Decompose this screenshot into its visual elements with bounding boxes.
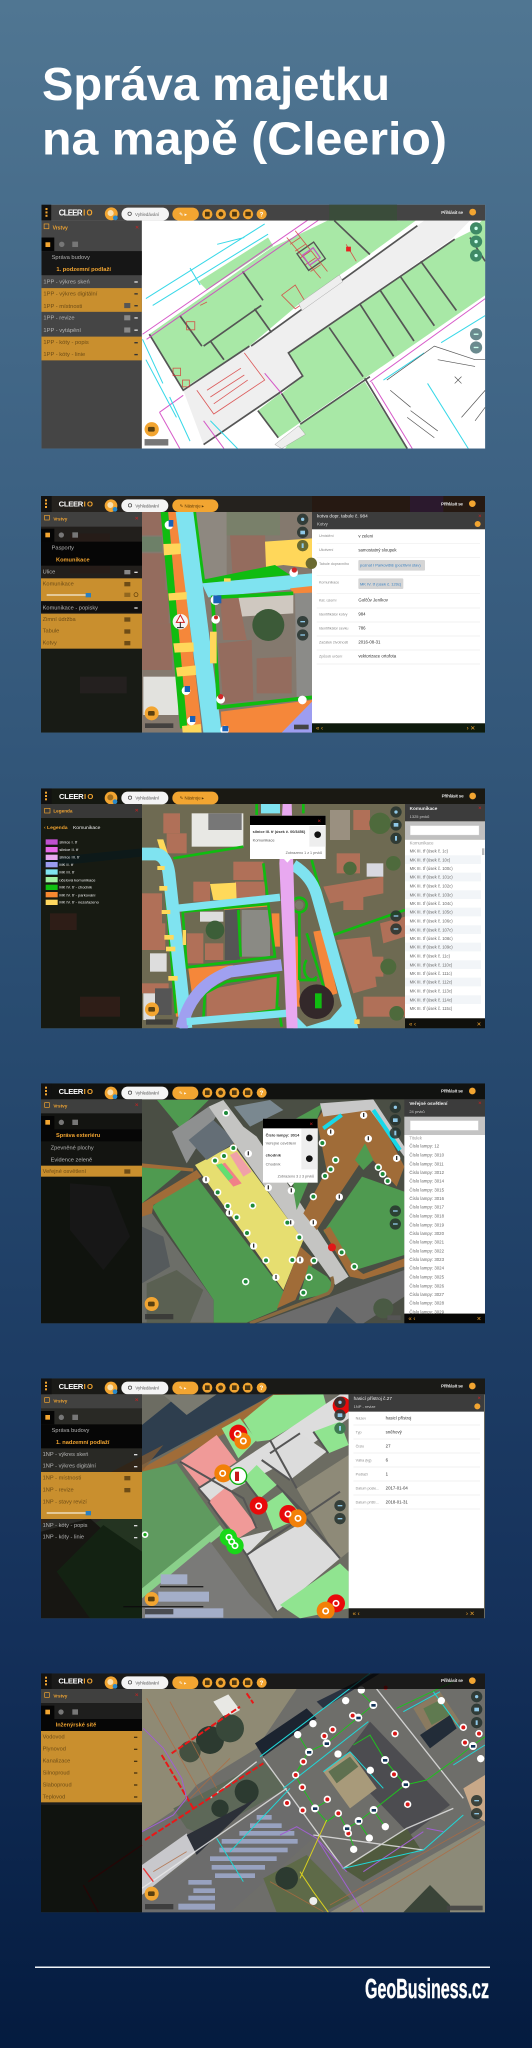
right panel: extinguisher detail: 1 (386, 1472, 389, 1477)
sidebar: layers: 1NP - revize (43, 1488, 74, 1494)
sidebar: layers: Slaboproud (43, 1782, 72, 1788)
sidebar: layers: Tabule (43, 629, 59, 635)
sidebar: layers: 1. nadzemní podlaží (56, 1440, 110, 1446)
right panel: sign anchor detail: Tabule dopravního (319, 562, 349, 566)
sidebar: layers: Silnoproud (43, 1770, 70, 1776)
right panel: lamp list: Číslo lampy: 3022 (409, 1248, 445, 1253)
sidebar: legend: silnice II. tř (59, 847, 79, 852)
right panel: lamp list: ✕ (477, 1317, 481, 1323)
right panel: road list (405, 804, 485, 1028)
right panel: road list: Komunikace (410, 841, 434, 846)
app header bar: IO (84, 792, 93, 801)
sidebar: legend: Legenda (53, 809, 73, 814)
app header bar: Vyhledávání (135, 1680, 160, 1685)
right panel: sign anchor detail: kotva dopr. tabule č. 984 (317, 514, 368, 519)
right panel: extinguisher detail: hasicí přístroj č.27 (354, 1396, 392, 1401)
sidebar: layers: Komunikace (56, 557, 90, 563)
popup: road info (250, 816, 326, 863)
right panel: lamp list: Číslo lampy: 3028 (409, 1301, 445, 1306)
sidebar: layers: Vrstvy (53, 1104, 68, 1109)
right panel: sign anchor detail: v zeleni (358, 533, 373, 538)
app header bar (41, 1673, 485, 1689)
sidebar: legend (41, 804, 142, 1028)
right panel: road list: MK III. tř (úsek č. 110c) (410, 962, 453, 967)
map controls (145, 1102, 401, 1320)
sidebar: layers: Komunikace (43, 582, 74, 588)
sidebar: layers: ✕ (135, 1103, 139, 1109)
right panel: extinguisher detail: 6 (386, 1458, 389, 1463)
app header bar: Vyhledávání (135, 212, 160, 217)
right panel: sign anchor detail: ✕ (478, 513, 482, 518)
right panel: road list: MK III. tř (úsek č. 104c) (410, 901, 453, 906)
right panel: lamp list: Číslo lampy: 3015 (409, 1187, 445, 1192)
right panel: lamp list: Číslo lampy: 3011 (409, 1161, 444, 1166)
app header bar: Vyhledávání (135, 796, 160, 801)
panel: screenshot 6 – engineering networks (41, 1673, 485, 1912)
popup: lamp info: Zobrazeno 3 z 3 prvků (278, 1175, 314, 1179)
right panel: lamp list: Číslo lampy: 3024 (409, 1266, 445, 1271)
popup: lamp info: chodník (266, 1153, 282, 1158)
sidebar: legend: silnice III. tř (59, 855, 80, 860)
app header bar: IO (83, 208, 93, 217)
sidebar: layers: Vodovod (43, 1735, 65, 1741)
right panel: road list: MK III. tř (úsek č. 114c) (410, 997, 453, 1002)
sidebar: layers: ✕ (135, 1693, 139, 1699)
app header bar: CLEER (59, 500, 84, 509)
right panel: lamp list: 24 prvků (409, 1109, 425, 1114)
right panel: lamp list: Číslo lampy: 3027 (409, 1292, 445, 1297)
right panel: extinguisher detail: hasicí přístroj (386, 1416, 411, 1421)
app header bar: CLEER (59, 1087, 84, 1096)
right panel: road list: MK III. tř (úsek č. 102c) (410, 883, 453, 888)
sidebar: layers (41, 221, 142, 449)
app header bar: Přihlásit se (441, 210, 464, 216)
right panel: sign anchor detail: Ukotvení (319, 548, 333, 552)
right panel: extinguisher detail: Váha (kg) (356, 1459, 372, 1463)
sidebar: layers: Správa budovy (52, 1428, 90, 1434)
app header bar (41, 496, 485, 512)
right panel: lamp list: Číslo lampy: 3023 (409, 1257, 445, 1262)
right panel: road list: MK III. tř (úsek č. 106c) (410, 918, 453, 923)
right panel: lamp list: Číslo lampy: 12 (409, 1144, 440, 1149)
right panel: lamp list: Číslo lampy: 3029 (409, 1309, 445, 1314)
sidebar: layers: Plynovod (43, 1747, 66, 1753)
sidebar: layers: Vrstvy (53, 225, 68, 231)
right panel: road list: MK III. tř (úsek č. 101c) (410, 875, 453, 880)
right panel: extinguisher detail: 2018-01-31 (386, 1500, 408, 1505)
right panel: road list: 1325 prvků (410, 814, 429, 819)
right panel: lamp list: ✕ (478, 1101, 482, 1106)
map: building rooms and fire safety markers (41, 1378, 485, 1620)
right panel: road list: MK III. tř (úsek č. 112c) (410, 980, 453, 985)
right panel: lamp list: Číslo lampy: 3014 (409, 1179, 445, 1184)
sidebar: legend: MK IV. tř - parkování (59, 892, 96, 897)
app header bar: ✎ Nástroje ▸ (180, 796, 204, 801)
right panel: road list: MK III. tř (úsek č. 113c) (410, 988, 453, 993)
sidebar: legend: silnice I. tř (59, 840, 78, 845)
right panel: lamp list: Titulek (409, 1136, 423, 1141)
sidebar: layers: 1PP - vytápění (43, 328, 81, 334)
right panel: extinguisher detail: Datum posle... (356, 1487, 379, 1491)
sidebar: layers: 1PP - místnosti (43, 304, 82, 310)
panel: screenshot 2 – road signs with detail panel (41, 496, 485, 734)
right panel: extinguisher detail: Podlaží (356, 1473, 368, 1477)
right panel: lamp list: Číslo lampy: 3026 (409, 1283, 445, 1288)
sidebar: layers: Ulice (43, 570, 55, 576)
sidebar: layers: ✕ (135, 516, 139, 522)
right panel: lamp list (404, 1099, 485, 1323)
map controls (145, 1691, 483, 1910)
right panel: extinguisher detail (349, 1394, 484, 1618)
map controls (145, 514, 317, 729)
right panel: sign anchor detail: Komunikace (319, 580, 339, 584)
sidebar: layers: 1NP - místnosti (43, 1476, 81, 1482)
map: satellite with roads (41, 496, 485, 734)
right panel: road list: MK III. tř (úsek č. 109c) (410, 945, 453, 950)
right panel: sign anchor detail: 786 (358, 626, 366, 631)
sidebar: layers: Vrstvy (53, 1399, 68, 1404)
map controls (145, 806, 402, 1025)
popup: road info: Zobrazeno 1 z 1 prvků (286, 851, 322, 855)
right panel: road list: MK III. tř (úsek č. 115c) (410, 1006, 453, 1011)
right panel: lamp list: Číslo lampy: 3025 (409, 1274, 445, 1279)
sidebar: layers: Veřejné osvětlení (43, 1169, 86, 1175)
right panel: sign anchor detail: Identifikátor sevku (319, 626, 348, 630)
app header bar: Přihlásit se (441, 1678, 463, 1683)
sidebar: legend: ✕ (135, 808, 139, 814)
sidebar: layers: 1NP - výkres digitální (43, 1464, 96, 1470)
sidebar: layers (41, 512, 142, 733)
right panel: extinguisher detail: Číslo (356, 1444, 364, 1449)
right panel: road list: MK III. tř (úsek č. 107c) (410, 927, 453, 932)
sidebar: layers: Zpevněné plochy (51, 1145, 94, 1151)
right panel: lamp list: Veřejné osvětlení (409, 1101, 448, 1106)
app header bar: CLEER (59, 1382, 84, 1391)
right panel: road list: MK III. tř (úsek č. 11c) (410, 953, 451, 958)
right panel: extinguisher detail: ✕ (477, 1396, 481, 1401)
right panel: sign anchor detail: Umístění (319, 534, 334, 538)
right panel: sign anchor detail: poznat I Parkoviště (pozitivní stav) (360, 563, 421, 568)
sidebar: layers: ✕ (135, 1398, 139, 1404)
right panel: lamp list: Číslo lampy: 3019 (409, 1222, 445, 1227)
right panel: sign anchor detail: Kotvy (317, 522, 329, 527)
app header bar: Přihlásit se (441, 1089, 463, 1094)
popup: road info: ✕ (317, 818, 321, 823)
right panel: lamp list: Číslo lampy: 3016 (409, 1196, 445, 1201)
sidebar: layers: Pasporty (52, 546, 74, 552)
app header bar: CLEER (59, 208, 83, 217)
sidebar: legend: MK IV. tř - chodník (59, 885, 92, 890)
right panel: lamp list: Číslo lampy: 3012 (409, 1170, 445, 1175)
sidebar: layers: 1NP - kóty - popis (43, 1523, 88, 1529)
right panel: road list: ✕ (477, 1022, 481, 1028)
popup: lamp info: ✕ (309, 1122, 313, 1127)
right panel: road list: MK III. tř (úsek č. 103c) (410, 892, 453, 897)
sidebar: layers: Vrstvy (53, 1693, 68, 1698)
sidebar: layers: Vrstvy (53, 516, 68, 521)
map: satellite with utility lines (41, 1673, 485, 1912)
panel: screenshot 5 – fire extinguishers on building plan (41, 1378, 485, 1620)
app header bar: Přihlásit se (441, 1384, 463, 1389)
right panel: sign anchor detail: Golčův Jeníkov (358, 598, 389, 603)
app header bar: ? (260, 1091, 264, 1097)
title (42, 58, 447, 164)
app header bar: ? (260, 1681, 264, 1687)
app header bar: Vyhledávání (135, 1386, 160, 1391)
sidebar: layers: Kanalizace (43, 1759, 70, 1765)
sidebar: layers: 1PP - výkres skeń (43, 280, 90, 286)
app header bar (41, 205, 485, 221)
right panel: road list: MK III. tř (úsek č. 1c) (410, 849, 449, 854)
sidebar: layers (41, 1394, 142, 1618)
panel: screenshot 1 – building floor plan (41, 205, 485, 449)
panel: screenshot 3 – road classes with legend and list (41, 788, 485, 1028)
sidebar: legend: MK IV. tř - nezařazeno (59, 900, 100, 905)
sidebar: legend: ‹ Legenda (44, 825, 68, 831)
app header bar: IO (84, 1087, 93, 1096)
app header bar: IO (84, 1382, 93, 1391)
right panel: extinguisher detail: 2017-01-04 (386, 1486, 408, 1491)
sidebar: layers: 1PP - kóty - popis (43, 340, 89, 346)
right panel: road list: MK III. tř (úsek č. 105c) (410, 910, 453, 915)
sidebar: layers: Teplovod (43, 1794, 65, 1800)
sidebar: layers: Inženýrské sítě (56, 1723, 96, 1729)
app header bar: Vyhledávání (135, 1091, 160, 1096)
sidebar: layers: Zimní údržba (43, 617, 77, 623)
right panel: lamp list: Číslo lampy: 3017 (409, 1205, 445, 1210)
app header bar (41, 788, 485, 804)
sidebar: layers: 1PP - výkres digitální (43, 292, 98, 298)
title: na mapě (Cleerio) (42, 112, 447, 164)
popup: road info: silnice III. tř (úsek č. 00/3456) (253, 830, 306, 834)
right panel: sign anchor detail: Způsob určení (319, 654, 342, 658)
right panel: sign anchor detail: « ‹ (316, 726, 323, 732)
right panel: road list: MK III. tř (úsek č. 111c) (410, 971, 453, 976)
map: exterior areas (41, 1083, 485, 1323)
popup: lamp info: Chodník (266, 1161, 281, 1166)
right panel: sign anchor detail: samostatný sloupek (358, 547, 397, 552)
right panel: sign anchor detail: Kat. území (319, 598, 336, 602)
sidebar: legend: MK II. tř (59, 862, 74, 867)
right panel: sign anchor detail (312, 512, 485, 733)
sidebar: layers: 1NP - stavy revizí (43, 1500, 87, 1506)
app header bar: Přihlásit se (442, 794, 464, 799)
popup: lamp info: Veřejné osvětlení (266, 1141, 297, 1146)
sidebar: layers: ✕ (135, 225, 139, 231)
app header bar (41, 1083, 485, 1099)
app header bar: Vyhledávání (135, 503, 160, 508)
right panel: lamp list: Číslo lampy: 3021 (409, 1240, 445, 1245)
right panel: sign anchor detail: Identifikátor kotvy (319, 612, 348, 616)
title: Správa majetku (42, 58, 390, 110)
right panel: sign anchor detail: MK IV. tř (úsek č. 120c) (360, 581, 402, 586)
right panel: sign anchor detail: vektorizace ortofota (358, 654, 397, 659)
sidebar: layers: 1PP - revize (43, 316, 75, 322)
app header bar: ✎ Nástroje ▸ (180, 503, 204, 508)
right panel: sign anchor detail: 2016-08-31 (358, 640, 381, 645)
sidebar: layers: Správa budovy (52, 255, 90, 261)
right panel: extinguisher detail: Název (356, 1417, 366, 1421)
right panel: road list: MK III. tř (úsek č. 10c) (410, 857, 451, 862)
right panel: road list: « ‹ (409, 1022, 416, 1028)
footer divider (35, 1966, 490, 1968)
right panel: road list: ✕ (478, 805, 482, 810)
panel: screenshot 4 – exterior management with public lighting (41, 1083, 485, 1323)
app header bar: ? (260, 211, 264, 218)
app header bar: CLEER (58, 1677, 83, 1686)
sidebar: layers (41, 1099, 142, 1323)
map controls (145, 222, 482, 446)
app header bar: CLEER (59, 792, 84, 801)
map controls (145, 1397, 346, 1614)
popup: lamp info: Číslo lampy: 3014 (266, 1132, 300, 1137)
sidebar: layers: 1NP - kóty - linie (43, 1535, 84, 1541)
right panel: road list: Komunikace (410, 806, 438, 811)
right panel: sign anchor detail: 984 (358, 612, 366, 617)
app header bar: ✎ ▸ (179, 1680, 187, 1685)
app header bar: Přihlásit se (441, 501, 463, 506)
right panel: extinguisher detail: sněhový (386, 1430, 403, 1435)
right panel: extinguisher detail: 1NP - revize (354, 1404, 376, 1409)
app header bar: ✎ ▸ (179, 1386, 187, 1391)
right panel: extinguisher detail: Datum příští... (356, 1501, 379, 1505)
sidebar: layers: Evidence zeleně (51, 1157, 92, 1163)
app header bar: IO (84, 500, 93, 509)
right panel: sign anchor detail: Začátek životnosti (319, 640, 348, 644)
app header bar (41, 1378, 485, 1394)
sidebar: layers: 1. podzemní podlaží (56, 267, 111, 273)
sidebar: layers: Správa exteriéru (56, 1133, 101, 1139)
sidebar: legend: účelová komunikace (59, 877, 96, 882)
sidebar: layers: 1NP - výkres skeń (43, 1452, 88, 1458)
sidebar: legend: Komunikace (73, 825, 101, 831)
sidebar: layers: 1PP - kóty - linie (43, 352, 85, 358)
right panel: extinguisher detail: Typ (356, 1431, 362, 1435)
app header bar: ✎ ▸ (179, 212, 187, 218)
right panel: lamp list: Číslo lampy: 3010 (409, 1152, 445, 1157)
sidebar: legend: MK III. tř (59, 870, 75, 875)
right panel: road list: MK III. tř (úsek č. 100c) (410, 866, 453, 871)
right panel: extinguisher detail: › ✕ (466, 1612, 475, 1618)
right panel: extinguisher detail: 27 (386, 1444, 391, 1449)
floor plan map (41, 205, 485, 449)
sidebar: layers: Komunikace - popisky (43, 605, 98, 611)
right panel: extinguisher detail: « ‹ (353, 1612, 360, 1618)
sidebar: layers (41, 1689, 142, 1912)
popup: lamp info (263, 1119, 318, 1187)
app header bar: ✎ ▸ (179, 1091, 187, 1096)
map: satellite with coloured road classes (41, 788, 485, 1028)
right panel: lamp list: « ‹ (408, 1317, 415, 1323)
sidebar: layers: Kotvy (43, 641, 57, 647)
right panel: lamp list: Číslo lampy: 3018 (409, 1214, 445, 1219)
right panel: sign anchor detail: › ✕ (467, 726, 475, 732)
app header bar: IO (83, 1677, 93, 1686)
app header bar: ? (260, 1386, 264, 1392)
right panel: lamp list: Číslo lampy: 3020 (409, 1231, 445, 1236)
right panel: road list: MK III. tř (úsek č. 108c) (410, 936, 453, 941)
popup: road info: Komunikace (253, 838, 275, 843)
